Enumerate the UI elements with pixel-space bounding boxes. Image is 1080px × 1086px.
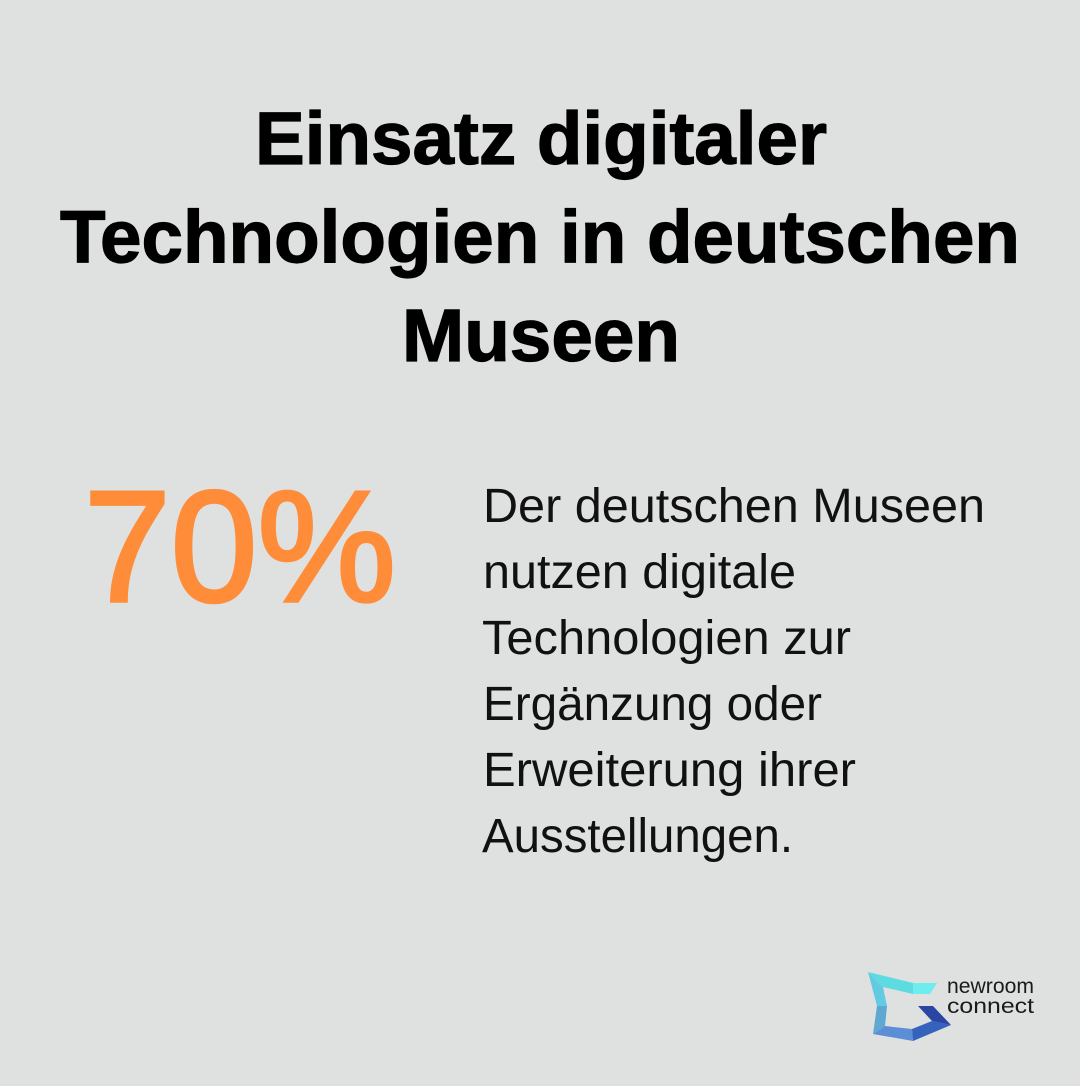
logo wordmark: connect [947, 995, 1034, 1018]
title: Museen [402, 294, 680, 377]
description text: nutzen digitale [483, 546, 796, 599]
description text: Erweiterung ihrer [483, 744, 856, 797]
statistic: 70%: 70% [84, 459, 396, 635]
description text: Der deutschen Museen [483, 480, 985, 533]
title: Einsatz digitaler [255, 97, 827, 180]
logo wordmark: newroom [947, 975, 1034, 998]
logo wordmark [947, 975, 1034, 1018]
description text: Ergänzung oder [483, 678, 822, 731]
title [60, 97, 1020, 377]
title: Technologien in deutschen [60, 196, 1020, 278]
description text: Ausstellungen. [482, 810, 793, 863]
description text [482, 480, 985, 863]
logo: newroom connect [868, 972, 1034, 1041]
description text: Technologien zur [482, 612, 851, 665]
icon: logo mark [868, 972, 951, 1041]
